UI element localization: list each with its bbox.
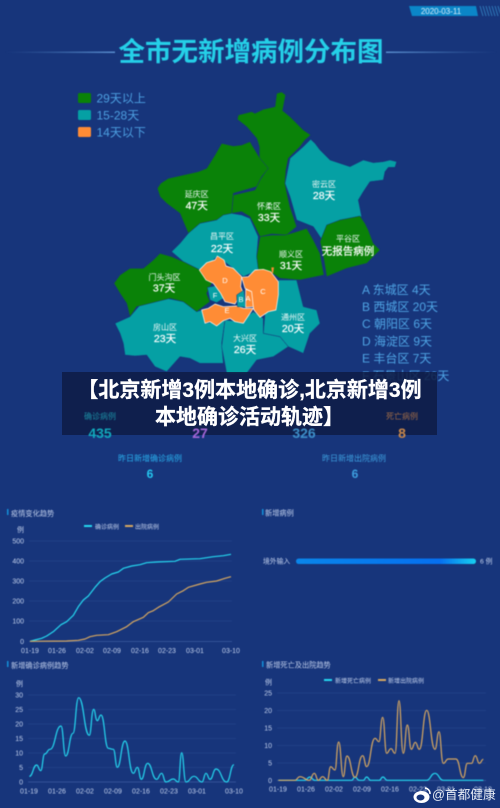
map legend: 15-28天: [96, 108, 139, 122]
daily increase figures: 昨日新增出院病例: [322, 453, 386, 463]
chart: new deaths and discharges: 01-19: [269, 786, 287, 794]
chart: epidemic trend: 确诊病例: [95, 523, 119, 531]
map of Beijing districts: 31天: [280, 260, 303, 272]
map legend: 29天以上: [96, 92, 146, 106]
map of Beijing districts: C: [260, 287, 266, 296]
map of Beijing districts: 房山区: [153, 322, 177, 332]
district list: D 海淀区 9天: [362, 334, 432, 348]
chart: epidemic trend: 500: [12, 538, 24, 546]
chart: new cases bar: [262, 508, 493, 566]
chart: daily new confirmed: [7, 661, 243, 796]
summary statistics: 326: [292, 425, 316, 441]
daily increase figures: 6: [147, 467, 154, 481]
chart: epidemic trend: 02-16: [131, 648, 149, 655]
district list: [362, 283, 449, 383]
chart: new deaths and discharges: 02-02: [325, 786, 343, 794]
chart: new deaths and discharges: 03-10: [474, 786, 492, 794]
map of Beijing districts: [114, 92, 397, 373]
chart: daily new confirmed: 0: [19, 780, 23, 786]
chart: daily new confirmed: 02-23: [160, 788, 178, 796]
chart: daily new confirmed: 10: [15, 750, 23, 758]
chart: daily new confirmed: 20: [15, 722, 23, 728]
map of Beijing districts: 22天: [211, 243, 234, 255]
district list: E 丰台区 7天: [362, 350, 431, 366]
watermark: @首都健康: [432, 788, 496, 802]
chart: daily new confirmed: 02-09: [104, 788, 122, 796]
chart: epidemic trend: 400: [12, 558, 24, 566]
chart: new deaths and discharges: [262, 660, 492, 794]
daily increase figures: [118, 453, 386, 481]
chart: epidemic trend: 出院病例: [135, 523, 159, 531]
chart: epidemic trend: 疫情变化趋势: [11, 509, 54, 518]
map of Beijing districts: 大兴区: [233, 333, 257, 343]
chart: daily new confirmed: 01-19: [20, 788, 38, 796]
headline banner: 【北京新增3例本地确诊,北京新增3例: [77, 379, 422, 402]
map of Beijing districts: 47天: [186, 200, 208, 212]
map legend: [78, 92, 146, 140]
chart: daily new confirmed: 新增确诊病例趋势: [11, 661, 69, 670]
map of Beijing districts: 无报告病例: [322, 244, 374, 258]
chart: new deaths and discharges: 10: [264, 743, 272, 750]
summary statistics: 435: [88, 425, 112, 441]
chart: new deaths and discharges: 02-09: [353, 786, 371, 794]
chart: daily new confirmed: 02-16: [132, 788, 150, 796]
chart: new deaths and discharges: 02-23: [409, 786, 427, 794]
chart: daily new confirmed: 例: [16, 679, 23, 688]
chart: new cases bar: 6 例: [480, 556, 493, 566]
chart: epidemic trend: 03-10: [222, 648, 240, 655]
map of Beijing districts: 20天: [282, 323, 305, 335]
chart: epidemic trend: 100: [12, 618, 24, 626]
district list: B 西城区 20天: [362, 300, 438, 314]
summary statistics: 确诊病例: [84, 411, 116, 421]
map of Beijing districts: 昌平区: [210, 232, 234, 241]
daily increase figures: 6: [352, 467, 359, 481]
map legend: 14天以下: [96, 126, 146, 140]
chart: daily new confirmed: 30: [15, 692, 23, 700]
title: 全市无新增病例分布图: [118, 37, 384, 67]
chart: new cases bar: 境外输入: [263, 556, 290, 566]
chart: epidemic trend: 例: [17, 525, 24, 534]
chart: epidemic trend: 200: [12, 598, 24, 606]
district list: F 石景山区 26天: [362, 369, 449, 383]
chart: new deaths and discharges: 新增死亡及出院趋势: [266, 660, 331, 670]
map of Beijing districts: D: [222, 276, 228, 285]
district list: A 东城区 4天: [362, 283, 431, 297]
chart: daily new confirmed: 02-02: [76, 788, 94, 796]
chart: epidemic trend: [7, 509, 240, 655]
map of Beijing districts: 26天: [234, 344, 257, 356]
map of Beijing districts: 门头沟区: [148, 272, 180, 282]
chart: daily new confirmed: 01-26: [48, 788, 66, 796]
chart: daily new confirmed: 03-10: [225, 788, 243, 796]
chart: epidemic trend: 03-01: [186, 648, 204, 655]
chart: new deaths and discharges: 15: [264, 726, 272, 732]
map of Beijing districts: 33天: [258, 212, 281, 224]
map of Beijing districts: 37天: [153, 282, 176, 294]
chart: new deaths and discharges: 例: [265, 678, 272, 686]
map of Beijing districts: 顺义区: [279, 250, 303, 259]
chart: new deaths and discharges: 03-01: [437, 786, 455, 794]
map of Beijing districts: 通州区: [281, 312, 305, 322]
chart: epidemic trend: 02-02: [76, 648, 94, 655]
map of Beijing districts: F: [213, 291, 218, 300]
chart: new deaths and discharges: 新增出院病例: [388, 677, 424, 685]
chart: new deaths and discharges: 0: [268, 778, 272, 785]
chart: new deaths and discharges: 5: [268, 760, 272, 768]
chart: new cases bar: 新增病例: [265, 508, 294, 518]
chart: daily new confirmed: 15: [15, 736, 23, 743]
chart: epidemic trend: 02-09: [103, 648, 121, 655]
chart: epidemic trend: 0: [20, 639, 24, 646]
headline banner: 本地确诊活动轨迹】: [155, 406, 344, 429]
map of Beijing districts: 延庆区: [185, 189, 209, 199]
daily increase figures: 昨日新增确诊病例: [118, 453, 182, 463]
headline banner: [62, 372, 437, 435]
map of Beijing districts: 平谷区: [336, 234, 360, 244]
chart: daily new confirmed: 25: [15, 707, 23, 714]
map of Beijing districts: 23天: [154, 333, 177, 345]
chart: new deaths and discharges: 新增死亡病例: [335, 677, 371, 685]
chart: daily new confirmed: 03-01: [188, 788, 206, 796]
chart: new deaths and discharges: 01-26: [297, 786, 315, 794]
summary statistics: 8: [398, 425, 406, 441]
chart: new deaths and discharges: 25: [264, 690, 272, 698]
chart: daily new confirmed: 5: [19, 765, 23, 772]
map of Beijing districts: A: [245, 294, 251, 303]
chart: new deaths and discharges: 20: [264, 708, 272, 715]
watermark: [414, 787, 496, 803]
date badge: 2020-03-11: [421, 7, 462, 16]
chart: epidemic trend: 01-26: [48, 648, 66, 655]
map of Beijing districts: E: [224, 306, 230, 315]
map of Beijing districts: 怀柔区: [257, 201, 281, 211]
map of Beijing districts: 28天: [313, 190, 336, 202]
chart: new deaths and discharges: 02-16: [381, 786, 399, 794]
date badge: [409, 6, 500, 16]
chart: epidemic trend: 02-23: [158, 648, 176, 655]
map of Beijing districts: B: [238, 295, 244, 304]
summary statistics: 死亡病例: [386, 411, 418, 421]
chart: epidemic trend: 300: [12, 578, 24, 586]
map of Beijing districts: 密云区: [312, 179, 336, 189]
chart: epidemic trend: 01-19: [21, 648, 39, 655]
summary statistics: 27: [192, 425, 208, 441]
district list: C 朝阳区 6天: [362, 317, 432, 331]
